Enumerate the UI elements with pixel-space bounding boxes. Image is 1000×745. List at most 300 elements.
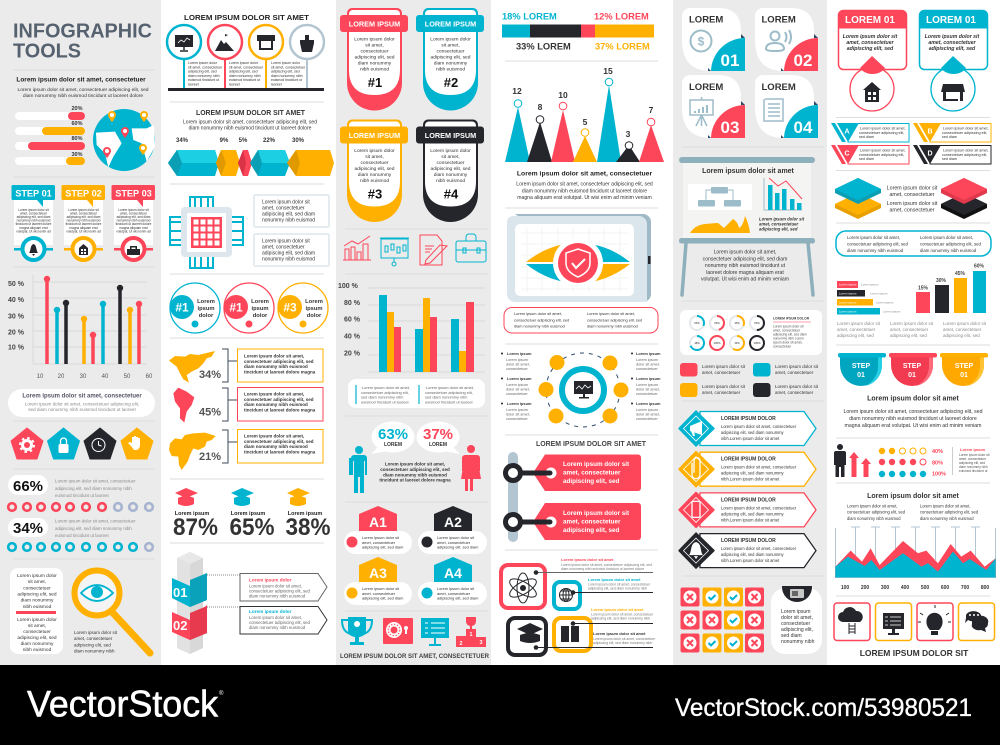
illustration: presentation table bbox=[679, 157, 815, 295]
illustration: presentation table: Lorem ipsum dolor sit bbox=[759, 216, 805, 222]
list item: bell: LOREM IPSUM DOLOR bbox=[721, 538, 776, 544]
badge: lorem ipsum #1: diam nonummy bbox=[358, 60, 392, 66]
footer: black band with source text: VectorStock bbox=[27, 684, 218, 724]
card: lorem 01 red with house: LOREM 01 bbox=[845, 15, 895, 26]
badge: lorem ipsum #2: diam nonummy bbox=[434, 60, 468, 66]
card: lorem 01 red with house: amet, consectetuer bbox=[846, 40, 895, 46]
diagram: isometric layers: amet, consectetuer bbox=[889, 192, 935, 198]
list item: paperclip: Lorem ipsum dolor sit amet, consectetuer bbox=[721, 465, 797, 470]
panel: step 01: STEP 01 bbox=[15, 188, 52, 198]
labels: A B C D ribbons: Lorem ipsum dolor sit amet, bbox=[860, 126, 906, 130]
chart: layered area chart: 200 bbox=[861, 585, 869, 591]
chart: people and dots: diam nonummy nibh bbox=[959, 465, 988, 469]
chart: lollipop chart: 10 % bbox=[8, 344, 25, 352]
tab: A2: A2 bbox=[444, 514, 462, 530]
panel: step 03: nonummy nibh euismod bbox=[117, 219, 151, 223]
chart: triangle peaks: 5 bbox=[583, 117, 588, 127]
callout: teal pill bbox=[836, 231, 991, 256]
chart: grouped bar chart: 100 % bbox=[338, 283, 359, 290]
diagram: orbit: Lorem ipsum bbox=[636, 401, 661, 406]
heading: LOREM IPSUM DOLOR SIT AMET bbox=[184, 13, 310, 22]
icons: bordered icon tiles bbox=[834, 603, 994, 640]
chart: donut gauges: 100% bbox=[753, 341, 761, 345]
chart: horizontal bars: Lorem ipsum bbox=[839, 292, 857, 296]
illustration: presentation table: Lorem ipsum dolor sit amet, bbox=[714, 250, 776, 256]
badge: lorem ipsum #3: #3 bbox=[368, 186, 382, 202]
tab: A1: amet, consectetuer bbox=[362, 540, 396, 545]
chart: layered area chart: 400 bbox=[901, 585, 909, 591]
chart: donut gauges: nonummy nibh Lorem bbox=[773, 336, 804, 340]
chart: 3d segmented bar: 34% bbox=[176, 138, 189, 144]
diagram: orbit: consectetuer bbox=[636, 417, 658, 421]
chart: lollipop chart: 30 bbox=[80, 374, 87, 380]
diagram: four icon squares with leaders: Lorem ipsum dolor sit amet, consectetuer bbox=[588, 582, 651, 586]
card: lorem 01 teal with store: LOREM 01 bbox=[926, 15, 976, 26]
panel: step 01: magna aliquam erat bbox=[19, 226, 48, 230]
stat: 34% with ring row: Lorem ipsum dolor sit amet, consectetuer bbox=[55, 518, 136, 524]
text block: three columns: Lorem ipsum dolor sit bbox=[890, 321, 934, 326]
chart: donut gauges: adipiscing elit, sed diam bbox=[773, 332, 807, 336]
panel: step 02: amet, consectetuer bbox=[70, 212, 98, 216]
chart: layered area chart: 100 bbox=[841, 585, 849, 591]
diagram: four icon squares with leaders: adipiscing elit, sed diam nonummy nibh bbox=[588, 586, 647, 590]
panel: column 2 bbox=[167, 13, 334, 654]
timeline: four circled icons: euismod tincidunt ut bbox=[229, 78, 260, 82]
map: south america 45% bbox=[173, 388, 323, 423]
chart: gender split: tincidunt ut laoreet dolore magna bbox=[379, 478, 451, 483]
grid: check and cross tiles bbox=[680, 588, 764, 652]
text card: magnifier notes: nibh euismod bbox=[23, 604, 52, 610]
panel: step 02: STEP 02 bbox=[65, 188, 102, 198]
steps: rounded cups: 01 bbox=[857, 372, 865, 379]
map: north america 34%: tincidunt ut laoreet dolore magna bbox=[244, 369, 316, 374]
labels: A B C D ribbons: Lorem ipsum dolor sit amet, bbox=[943, 126, 988, 130]
icons: pentagon badges bbox=[11, 428, 153, 459]
badge: lorem ipsum #2: adipiscing elit, sed bbox=[431, 54, 471, 60]
map: north america 34%: consectetuer adipiscing elit, sed bbox=[244, 359, 314, 364]
text block: three columns: Lorem ipsum dolor sit bbox=[943, 321, 987, 326]
chart: layered area chart: 800 bbox=[981, 585, 989, 591]
timeline: four circled icons: Lorem ipsum dolor bbox=[271, 61, 301, 65]
diagram: orbit: Lorem ipsum bbox=[636, 351, 661, 356]
badges: ranked circles: #1 bbox=[229, 300, 243, 314]
badge: lorem ipsum #4: Lorem ipsum dolor bbox=[430, 148, 471, 154]
text card: magnifier notes: diam nonummy bbox=[21, 641, 54, 647]
stat: 34% with ring row: adipiscing elit, sed diam nonummy nibh bbox=[55, 526, 132, 531]
callout: lorem ipsum dolor red bbox=[240, 574, 327, 601]
card: lorem 01 red with house: adipiscing elit, sed bbox=[847, 46, 894, 52]
map: north america 34%: Lorem ipsum dolor sit amet, bbox=[244, 354, 304, 358]
callout: teal pill: consectetuer adipiscing elit, sed bbox=[920, 242, 982, 246]
text block: area chart heading: Lorem ipsum dolor sit amet, bbox=[847, 504, 898, 508]
card: 02 speaker: LOREM bbox=[762, 14, 796, 26]
text block: peaks description: diam nonummy nibh euismod tincidunt ut laoreet dolore bbox=[522, 188, 647, 194]
badges: ranked circles: Lorem bbox=[305, 299, 323, 305]
panel: step 03: adipiscing elit, sed diam bbox=[117, 215, 151, 219]
legend: color swatches bbox=[680, 363, 819, 397]
text block: area chart heading: Lorem ipsum dolor sit amet bbox=[867, 493, 960, 500]
text block: three columns: adipiscing elit, sed bbox=[943, 333, 980, 338]
labels: A B C D ribbons: consectetuer adipiscing elit, bbox=[859, 131, 904, 135]
chart: lollipop chart: 50 bbox=[124, 374, 131, 380]
list item: paperclip: nibh.Lorem ipsum dolor sit amet bbox=[721, 477, 780, 482]
timeline: four circled icons: adipiscing elit, sed bbox=[188, 70, 217, 74]
card: 01 dollar: $ bbox=[698, 34, 705, 48]
callout: text pill: Lorem ipsum dolor sit amet, consectetuer bbox=[22, 394, 142, 400]
diagram: orbit: consectetuer bbox=[636, 367, 658, 371]
legend: color swatches: amet, consectetuer bbox=[702, 390, 741, 395]
diagram: orbit: Lorem ipsum bbox=[636, 376, 661, 381]
map: north america 34%: diam nonummy nibh euismod bbox=[244, 364, 308, 369]
icon: microchip bbox=[170, 197, 243, 268]
text card: magnifier notes: adipiscing elit, sed bbox=[17, 635, 57, 641]
text boxes: microchip notes: nonummy nibh euismod bbox=[262, 256, 315, 262]
map: north america 34% bbox=[169, 349, 323, 383]
icon: globe with pins bbox=[93, 109, 155, 171]
chart: people and dots: 80% bbox=[932, 460, 943, 466]
callout: lorem ipsum dolor teal: Lorem ipsum dolor sit amet, bbox=[249, 615, 302, 620]
tab: A2 bbox=[418, 506, 487, 554]
diagram: red tags on rail: adipiscing elit, sed bbox=[563, 478, 619, 485]
text block: chart notes: consectetuer adipiscing elit, bbox=[425, 390, 473, 395]
title: TOOLS bbox=[13, 40, 81, 62]
panel: column 3 bbox=[338, 8, 489, 660]
diagram: orbit: consectetuer bbox=[506, 367, 528, 371]
chart: layered area chart: 300 bbox=[881, 585, 889, 591]
list item: paperclip bbox=[679, 452, 816, 487]
tab: A2: Lorem ipsum dolor sit bbox=[437, 535, 475, 540]
callout: text pill bbox=[8, 389, 155, 417]
footer: black band with source text: VectorStock.com/53980521 bbox=[675, 694, 972, 722]
chart: people and dots: euismod tincidunt ut bbox=[959, 469, 987, 473]
text boxes: microchip notes bbox=[254, 195, 329, 266]
panel: step 03: STEP 03 bbox=[115, 188, 152, 198]
text block: second heading bbox=[183, 110, 317, 132]
chart: isometric stacked column: 02 bbox=[173, 618, 187, 633]
callout: two text columns: Lorem ipsum dolor sit amet, bbox=[587, 311, 635, 316]
diagram: four icon squares with leaders: Lorem ipsum dolor sit amet bbox=[588, 577, 641, 582]
chart: 3d segmented bar: 22% bbox=[263, 138, 276, 144]
panel: step 03 bbox=[112, 185, 155, 260]
list item: bell bbox=[679, 533, 816, 568]
diagram: orbit: Lorem ipsum bbox=[636, 358, 658, 362]
labels: A B C D ribbons: consectetuer adipiscing elit, bbox=[859, 153, 904, 157]
legend: color swatches: Lorem ipsum dolor sit bbox=[702, 364, 746, 369]
chart: donut gauges: 48% bbox=[694, 341, 700, 345]
stats: graduation caps: 38% bbox=[286, 514, 330, 541]
illustration: tablet with shield bbox=[507, 214, 651, 302]
map: eurasia africa 21%: consectetuer adipiscing elit, sed bbox=[244, 439, 314, 444]
icons: trophy, safe, checklist, podium: 2 bbox=[459, 641, 463, 647]
card: lorem 01 teal with store: adipiscing elit, sed bbox=[929, 46, 976, 52]
chart: horizontal bars: Lorem ipsum bbox=[876, 300, 894, 304]
labels: A B C D ribbons: consectetuer adipiscing elit, bbox=[942, 153, 987, 157]
text block: chart notes bbox=[348, 379, 485, 408]
card: 04 document: 04 bbox=[794, 118, 813, 137]
diagram: orbit: Lorem ipsum bbox=[507, 376, 532, 381]
text block: steps description: diam nonummy nibh euismod tincidunt ut laoreet dolore bbox=[849, 416, 977, 422]
text block: steps description bbox=[844, 396, 983, 429]
text boxes: microchip notes: amet, consectetuer bbox=[262, 206, 305, 212]
stats: graduation caps: Lorem ipsum bbox=[231, 511, 265, 517]
timeline: four circled icons: diam nonummy nibh bbox=[271, 74, 303, 78]
card: 03 presentation bbox=[682, 75, 745, 138]
text card: magnifier notes: consectetuer bbox=[23, 629, 51, 635]
text block: three columns: adipiscing elit, sed bbox=[890, 333, 927, 338]
tab: A3: adipiscing elit, sed diam bbox=[362, 596, 403, 601]
diagram: four icon squares with leaders: Lorem ipsum dolor sit amet bbox=[593, 631, 646, 636]
text block: area chart heading: diam nonummy nibh euismod bbox=[847, 516, 901, 521]
chart: 3d segmented bar: 9% bbox=[220, 138, 229, 144]
text boxes: microchip notes: Lorem ipsum dolor sit bbox=[262, 238, 310, 244]
chart: grouped bar chart: 80 % bbox=[344, 300, 361, 307]
panel: step 01 bbox=[12, 185, 55, 260]
text card: magnifier notes: sit amet, bbox=[28, 579, 46, 585]
chart: lollipop chart: 20 bbox=[58, 374, 65, 380]
map: eurasia africa 21%: 21% bbox=[199, 451, 221, 463]
badges: ranked circles: #3 bbox=[283, 300, 297, 314]
chart: donut gauges bbox=[680, 310, 822, 355]
badge: lorem ipsum #4: consectetuer bbox=[436, 160, 465, 166]
panel: step 01: Lorem ipsum dolor sit bbox=[18, 208, 49, 212]
diagram: orbit: consectetuer bbox=[506, 417, 528, 421]
callout: lorem ipsum dolor teal: diam nonummy nibh euismod bbox=[249, 625, 306, 630]
chart: progress bars: 80% bbox=[71, 136, 83, 142]
map: south america 45%: diam nonummy nibh euismod bbox=[244, 402, 308, 407]
badge: lorem ipsum #3: nibh euismod bbox=[360, 178, 389, 184]
card: lorem 01 teal with store: Lorem ipsum dolor sit bbox=[925, 34, 980, 40]
badge: lorem ipsum #1: consectetuer bbox=[360, 48, 389, 54]
diagram: isometric layers: Lorem ipsum dolor sit bbox=[887, 186, 938, 192]
map: eurasia africa 21%: Lorem ipsum dolor sit amet, bbox=[244, 434, 304, 438]
timeline: four circled icons: diam nonummy nibh bbox=[188, 74, 220, 78]
list item: megaphone bbox=[679, 411, 816, 446]
badge: lorem ipsum #2: sit amet, bbox=[441, 42, 460, 48]
card: 03 presentation: LOREM bbox=[689, 82, 723, 93]
card: 01 dollar bbox=[682, 8, 745, 71]
stats: graduation caps: Lorem ipsum bbox=[288, 511, 322, 517]
panel: step 01: tincidunt ut laoreet dolore bbox=[16, 222, 52, 226]
chart: layered area chart: 700 bbox=[961, 585, 969, 591]
stat: 66% with ring row: adipiscing elit, sed diam nonummy nibh bbox=[55, 486, 132, 491]
stats: graduation caps: 65% bbox=[230, 514, 274, 541]
diagram: orbit: Lorem ipsum bbox=[636, 383, 658, 387]
badge: lorem ipsum #2: nibh euismod bbox=[436, 66, 465, 72]
diagram: orbit: dolor sit amet, bbox=[506, 362, 530, 366]
text block: three columns: amet, consectetuer bbox=[837, 327, 876, 332]
text card: magnifier notes: adipiscing elit, sed bbox=[17, 591, 57, 597]
illustration: presentation table: amet, consectetuer bbox=[759, 222, 798, 226]
diagram: orbit: dolor sit amet, bbox=[636, 412, 660, 416]
badge: lorem ipsum #3: adipiscing elit, sed bbox=[355, 166, 395, 172]
stat: 66% with ring row: 66% bbox=[13, 478, 43, 495]
list item: phone: nibh.Lorem ipsum dolor sit amet bbox=[721, 517, 780, 522]
text boxes: microchip notes: adipiscing elit, sed diam bbox=[262, 250, 315, 256]
chart: percentage strip: 12% LOREM bbox=[594, 12, 649, 22]
labels: A B C D ribbons: D bbox=[927, 150, 933, 158]
labels: A B C D ribbons: B bbox=[927, 128, 933, 136]
chart: triangle peaks: 7 bbox=[649, 105, 654, 115]
tab: A2: adipiscing elit, sed diam bbox=[437, 545, 478, 550]
badge: lorem ipsum #4: #4 bbox=[444, 186, 459, 202]
tab: A3: A3 bbox=[369, 565, 387, 581]
labels: A B C D ribbons bbox=[831, 123, 991, 164]
diagram: orbit: consectetuer bbox=[636, 392, 658, 396]
badge: lorem ipsum #4: nibh euismod bbox=[436, 178, 465, 184]
chart: horizontal bars: Lorem ipsum bbox=[839, 300, 857, 304]
text block: three columns: adipiscing elit, sed bbox=[837, 333, 874, 338]
diagram: red tags on rail: amet, consectetuer bbox=[563, 518, 621, 526]
map: south america 45%: Lorem ipsum dolor sit amet, bbox=[244, 392, 304, 396]
chart: donut gauges: Lorem ipsum dolor sit bbox=[773, 324, 804, 328]
chart: 3d segmented bar bbox=[168, 138, 334, 176]
callout: teal pill: Lorem ipsum dolor sit amet, bbox=[920, 235, 973, 240]
badge: lorem ipsum #1: adipiscing elit, sed bbox=[355, 54, 395, 60]
chart: horizontal bars: Lorem ipsum bbox=[839, 310, 857, 314]
badge: lorem ipsum #3: LOREM IPSUM bbox=[349, 131, 400, 140]
steps: rounded cups: STEP bbox=[852, 363, 870, 370]
illustration: presentation table: adipiscing elit, sed bbox=[759, 226, 798, 232]
chart: people and dots: Lorem ipsum bbox=[960, 447, 986, 452]
text block: steps description: Lorem ipsum dolor sit amet, consectetuer adipiscing elit, sed bbox=[844, 409, 983, 415]
diagram: four icon squares with leaders: Lorem ipsum dolor sit amet, consectetuer bbox=[591, 612, 654, 616]
icons: trophy, safe, checklist, podium: 1 bbox=[469, 632, 473, 638]
tab: A4 bbox=[418, 557, 487, 605]
list item: phone: adipiscing elit, sed diam nonummy bbox=[721, 511, 785, 516]
list item: bell: adipiscing elit, sed diam nonummy bbox=[721, 552, 785, 557]
text block: intro: diam nonummy nibh euismod tincidunt ut laoreet dolore bbox=[23, 93, 143, 99]
stat: 66% with ring row: euismod tincidunt ut laoreet bbox=[55, 493, 109, 498]
map: eurasia africa 21%: tincidunt ut laoreet dolore magna bbox=[244, 449, 316, 454]
text block: magnifier caption: Lorem ipsum dolor sit bbox=[74, 630, 118, 635]
list item: bell: nibh.Lorem ipsum dolor sit amet bbox=[721, 558, 780, 563]
diagram: red tags on rail: amet, consectetuer bbox=[563, 470, 621, 476]
badges: ranked circles bbox=[170, 283, 328, 333]
chart: donut gauges: 45% bbox=[734, 321, 740, 325]
panel: step 02: volutpat. Ut wisi enim ad bbox=[66, 229, 101, 233]
tab: A3: amet, consectetuer bbox=[362, 591, 396, 596]
callout: text pill: Lorem ipsum dolor sit amet, consectetuer adipiscing elit, bbox=[25, 402, 139, 406]
text block: chart notes: euismod tincidunt ut laoreet bbox=[425, 399, 473, 404]
chart: vertical bars: 30% bbox=[936, 278, 947, 284]
badge: lorem ipsum #2 bbox=[416, 8, 484, 110]
tab: A1: adipiscing elit, sed diam bbox=[362, 545, 403, 550]
stats: graduation caps bbox=[173, 488, 330, 541]
icons: line icons row bbox=[343, 234, 486, 266]
text block: chart notes: Lorem ipsum dolor sit amet, bbox=[362, 385, 410, 390]
tab: A1 bbox=[344, 506, 412, 554]
panel: step 02: tincidunt ut laoreet dolore bbox=[66, 222, 102, 226]
panel: step 03: tincidunt ut laoreet dolore bbox=[116, 222, 152, 226]
chart: 3d segmented bar: 5% bbox=[239, 138, 248, 144]
map: south america 45%: 45% bbox=[199, 406, 221, 418]
chart: lollipop chart: 40 % bbox=[8, 297, 25, 304]
stat: 66% with ring row bbox=[8, 475, 153, 511]
text block: steps description: magna aliquam erat volutpat. Ut wisi enim ad minim veniam bbox=[845, 423, 981, 429]
chart: grouped bar chart: 60 % bbox=[344, 316, 361, 324]
card: 04 document: LOREM bbox=[762, 82, 796, 93]
steps: rounded cups bbox=[838, 353, 988, 386]
labels: A B C D ribbons: sed diam bbox=[942, 135, 957, 139]
illustration: presentation table: nonummy nibh euismod tincidunt ut bbox=[705, 263, 786, 269]
badge: lorem ipsum #2: Lorem ipsum dolor bbox=[430, 36, 471, 42]
badge: lorem ipsum #2: LOREM IPSUM bbox=[425, 20, 476, 28]
chart: grouped bar chart bbox=[338, 283, 485, 372]
diagram: four icon squares with leaders: Lorem ipsum dolor sit amet bbox=[591, 607, 644, 612]
chart: people and dots: 40% bbox=[932, 449, 943, 455]
chart: triangle peaks: 8 bbox=[538, 102, 543, 112]
chart: progress bars bbox=[15, 106, 85, 165]
callout: teal pill: diam nonummy nibh euismod bbox=[847, 248, 904, 253]
steps: rounded cups: 01 bbox=[908, 372, 916, 379]
chart: triangle peaks: 10 bbox=[558, 90, 568, 100]
chart: progress bars: 30% bbox=[71, 152, 83, 158]
card: safe note: adipiscing elit, bbox=[781, 627, 813, 633]
chart: gender split: Lorem ipsum dolor sit amet, bbox=[385, 462, 445, 466]
tab: A4: amet, consectetuer bbox=[437, 591, 471, 596]
badge: lorem ipsum #1: Lorem ipsum dolor bbox=[354, 36, 395, 42]
card: safe note: consectetuer bbox=[781, 621, 810, 627]
badge: lorem ipsum #4: diam nonummy bbox=[434, 172, 468, 178]
timeline: four circled icons: sit amet, consectetuer bbox=[271, 65, 306, 69]
badges: ranked circles: #1 bbox=[175, 300, 189, 314]
list item: megaphone: LOREM IPSUM DOLOR bbox=[721, 416, 776, 422]
callout: teal pill: Lorem ipsum dolor sit amet, bbox=[847, 235, 900, 240]
stat: 34% with ring row: 34% bbox=[13, 520, 43, 537]
diagram: isometric layers: Lorem ipsum dolor sit bbox=[887, 201, 938, 207]
chart: people and dots: 100% bbox=[932, 472, 946, 478]
diagram: orbit: Lorem ipsum bbox=[506, 408, 528, 412]
chart: horizontal bars: Lorem ipsum bbox=[870, 292, 888, 296]
text block: steps description: Lorem ipsum dolor sit amet bbox=[867, 396, 960, 402]
badge: lorem ipsum #3: sit amet, bbox=[365, 154, 384, 160]
card: 03 presentation: 03 bbox=[721, 118, 739, 137]
panel: step 01: volutpat. Ut wisi enim ad bbox=[16, 229, 51, 233]
diagram: four icon squares with leaders: adipiscing elit, sed diam nonummy nibh bbox=[593, 641, 652, 645]
diagram: orbit: dolor sit amet, bbox=[506, 388, 530, 392]
panel: column 4 bbox=[501, 12, 664, 655]
callout: two text columns: consectetuer adipiscing elit, sed bbox=[514, 317, 569, 322]
callout: two text columns: diam nonummy nibh euismod bbox=[514, 324, 565, 329]
chart: vertical bars: 45% bbox=[955, 271, 966, 277]
map: eurasia africa 21% bbox=[169, 430, 323, 470]
stat: 66% with ring row: Lorem ipsum dolor sit amet, consectetuer bbox=[55, 478, 136, 484]
text block: chart notes: euismod tincidunt ut laoreet bbox=[361, 399, 409, 404]
timeline: four circled icons: euismod tincidunt ut bbox=[271, 78, 302, 82]
diagram: orbit bbox=[501, 351, 661, 427]
text block: three columns: Lorem ipsum dolor sit bbox=[837, 321, 881, 326]
steps: rounded cups: STEP bbox=[903, 363, 921, 370]
tab: A3: Lorem ipsum dolor sit bbox=[362, 586, 400, 591]
map: south america 45%: tincidunt ut laoreet dolore magna bbox=[244, 407, 316, 412]
diagram: four icon squares with leaders bbox=[501, 557, 656, 655]
text block: second heading: LOREM IPSUM DOLOR SIT AMET bbox=[196, 110, 306, 117]
card: 04 document bbox=[755, 75, 818, 138]
chart: donut gauges: LOREM IPSUM DOLOR bbox=[773, 316, 810, 320]
legend: color swatches: amet, consectetuer bbox=[775, 390, 814, 395]
chart: vertical bars bbox=[916, 264, 986, 313]
text block: peaks description: Lorem ipsum dolor sit amet, consectetuer bbox=[517, 170, 652, 178]
timeline: four circled icons bbox=[167, 25, 324, 91]
chart: lollipop chart: 30 % bbox=[8, 314, 25, 320]
illustration: presentation table: volutpat. Ut wisi enim ad minim veniam bbox=[701, 277, 789, 283]
card: 01 dollar: LOREM bbox=[689, 14, 723, 26]
chart: lollipop chart: 20 % bbox=[8, 330, 25, 336]
legend: color swatches: Lorem ipsum dolor sit bbox=[775, 364, 819, 369]
callout: lorem ipsum dolor teal: Lorem ipsum dolor bbox=[249, 609, 292, 614]
list item: paperclip: adipiscing elit, sed diam nonummy bbox=[721, 471, 785, 476]
card: lorem 01 red with house: Lorem ipsum dolor sit bbox=[843, 34, 898, 40]
